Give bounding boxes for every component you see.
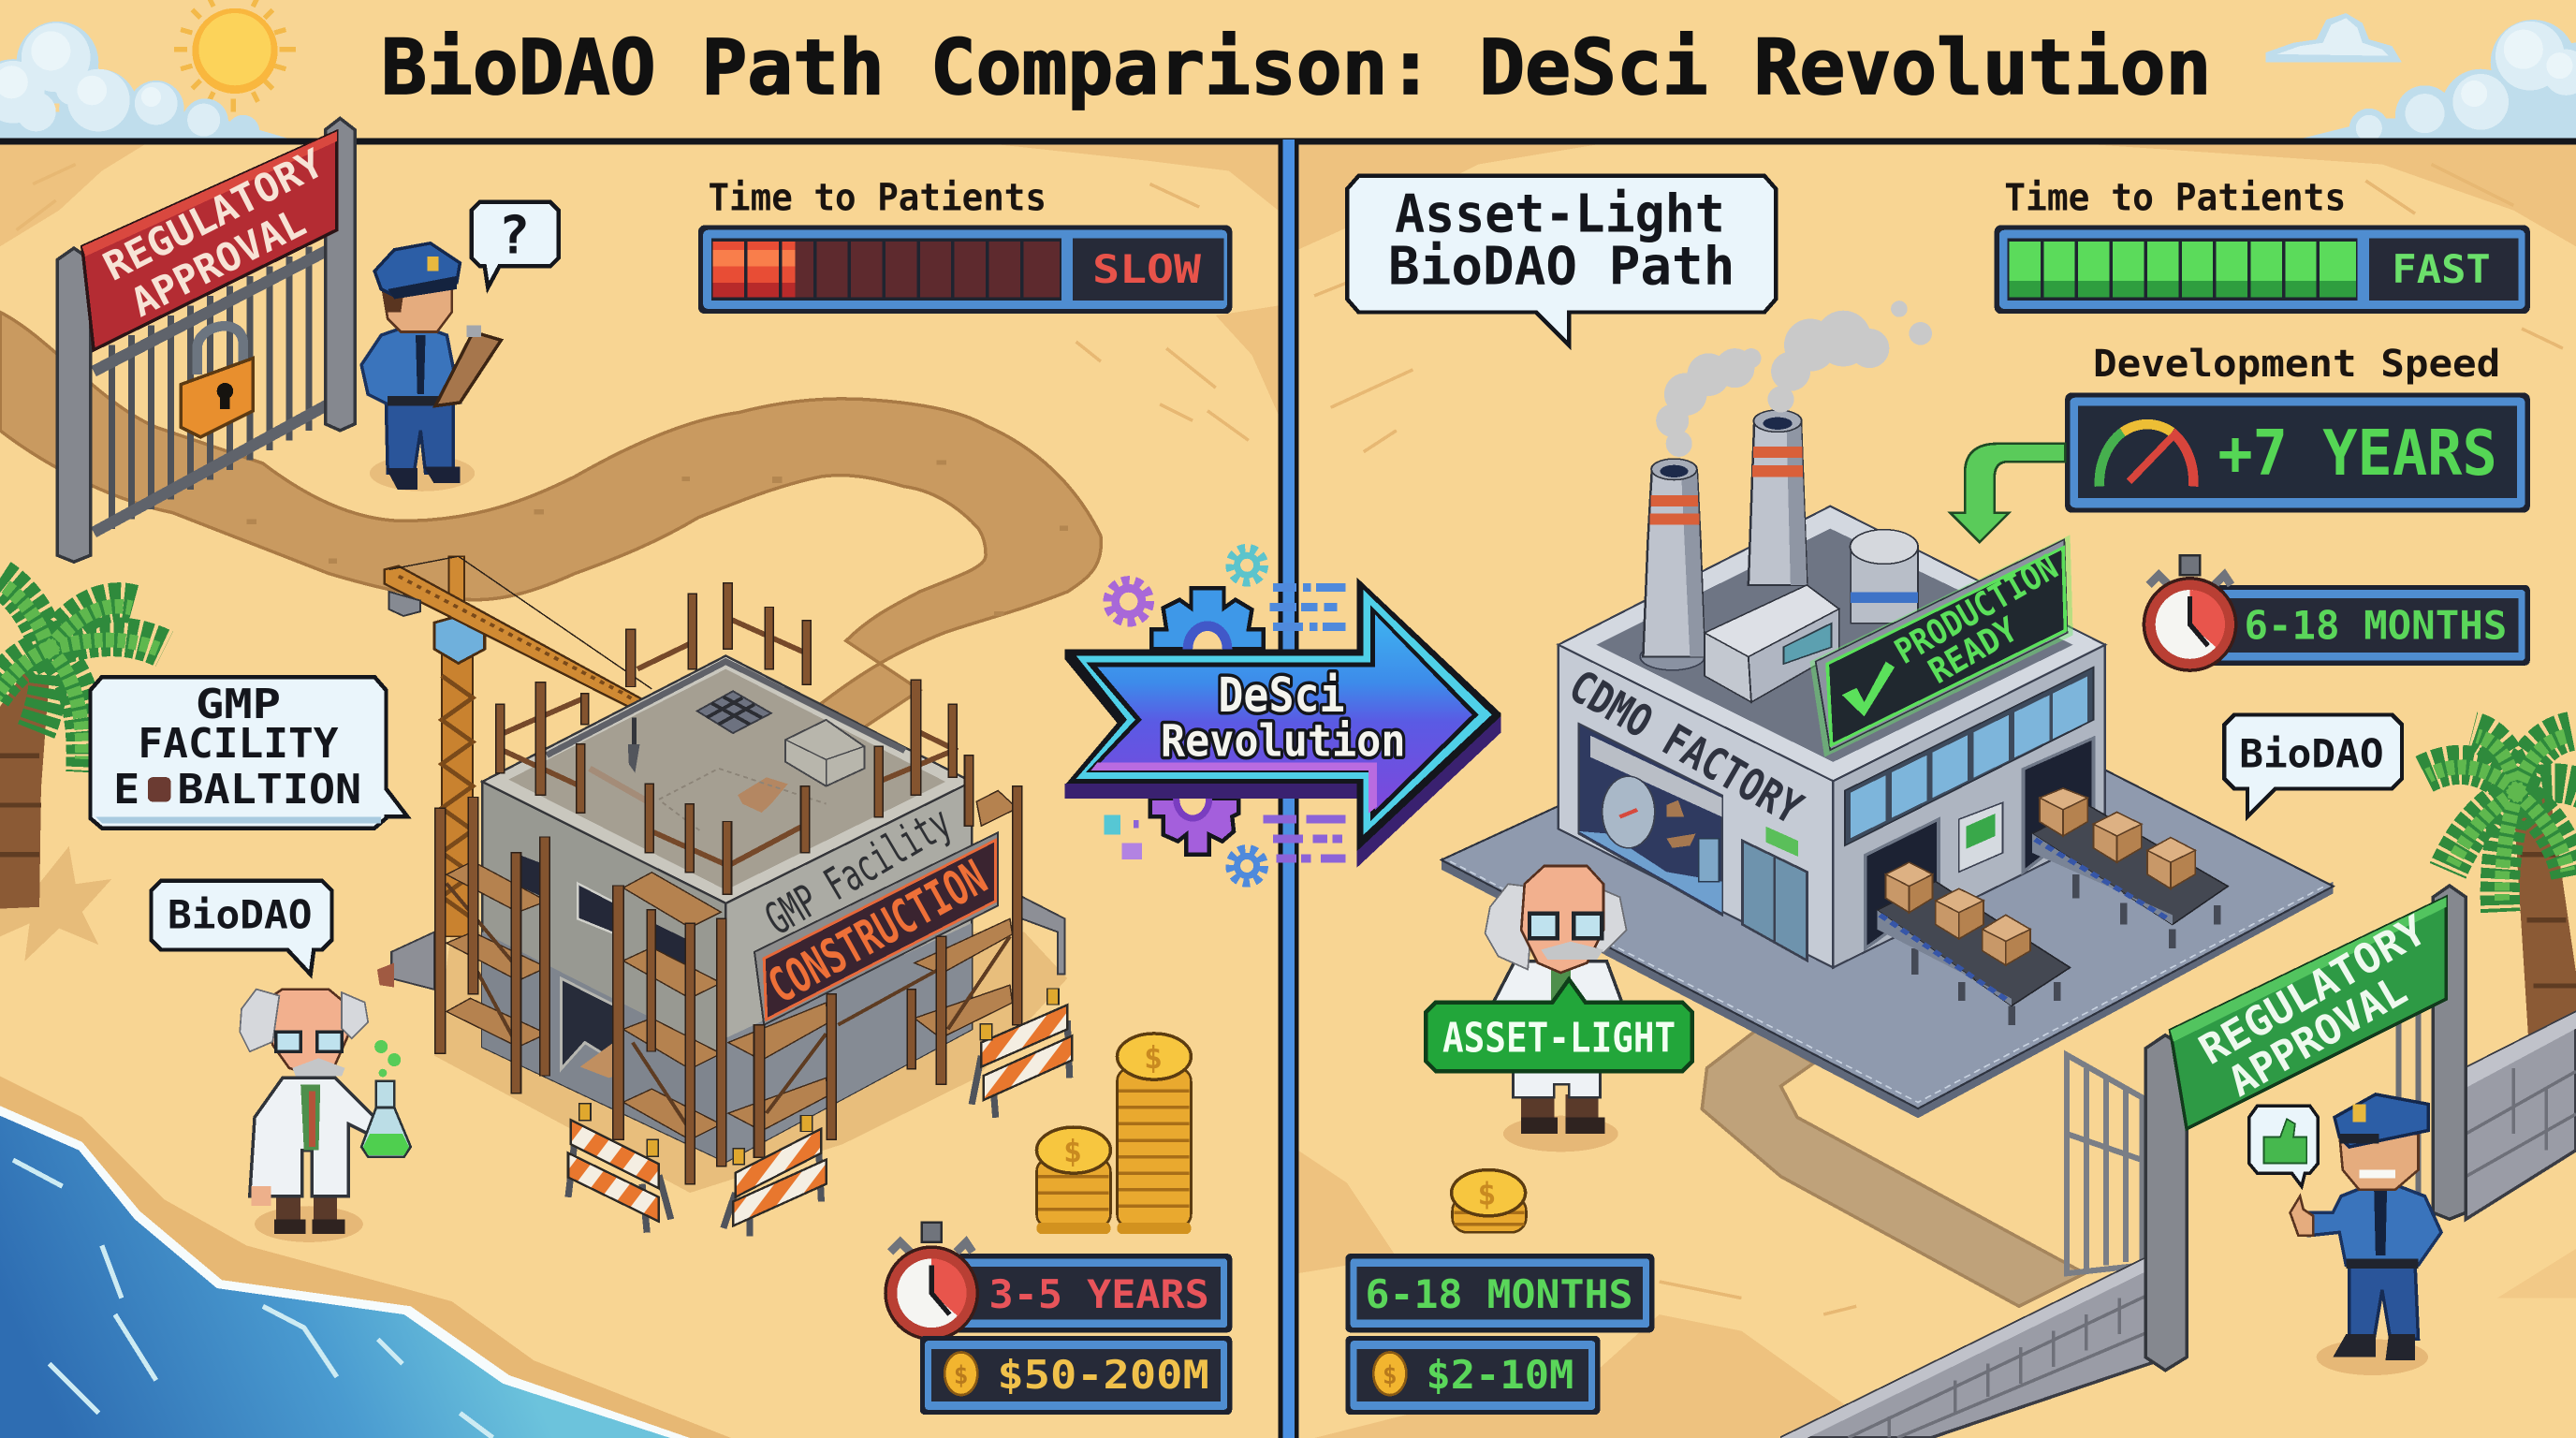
icon: striped barrier left — [568, 1104, 671, 1233]
roof tank — [1851, 530, 1918, 624]
smoke plumes — [1656, 301, 1932, 457]
window band — [1845, 668, 2093, 845]
stat panel: 50-200M cost — [920, 1336, 1232, 1415]
arrow: speed to production ready — [1950, 444, 2065, 542]
badge: asset-light — [1426, 979, 1692, 1071]
callout: GMP facility escalation: FACILITY — [138, 720, 339, 768]
chimney left — [1640, 459, 1705, 670]
crane mast — [385, 556, 664, 936]
icon: left palm tree — [0, 579, 165, 961]
callout: GMP facility escalation: GMP — [196, 681, 281, 728]
icon: right palm tree — [2422, 731, 2576, 1117]
icon: right small cloud — [2265, 13, 2402, 63]
character: worried police officer — [361, 202, 559, 492]
arrow label: DeSci — [1218, 668, 1345, 724]
central divider — [1278, 139, 1298, 1438]
icon: locked regulatory gate: REGULATORY — [96, 139, 331, 290]
icon: open regulatory gate and walls: REGULATORY — [2191, 906, 2435, 1075]
arrow label — [1161, 668, 1405, 767]
stat panel: 6-18 months bottom — [1345, 1254, 1654, 1332]
red banner — [82, 131, 337, 350]
scaffold braces — [446, 884, 1010, 1126]
concrete plate — [1442, 858, 2334, 1118]
icon: small blue gear — [1231, 849, 1264, 882]
garage opening — [1579, 724, 1722, 915]
icon: small coin stack — [1452, 1170, 1526, 1232]
speech bubble: asset-light BioDAO path — [1347, 176, 1776, 345]
stat panel: 6-18 months top: 6-18 MONTHS — [2244, 603, 2507, 649]
text: construction sign: CONSTRUCTION — [759, 850, 996, 1015]
dirt path to open gate — [1702, 1030, 2085, 1306]
text: production ready: READY — [1922, 609, 2025, 692]
question bubble: ? — [498, 205, 530, 266]
character: BioDAO scientist with flask — [240, 990, 411, 1242]
stat panel: 3-5 years — [886, 1223, 1232, 1339]
panel: asset-light path ground — [1298, 139, 2576, 1438]
callout: GMP facility escalation: BALTION — [178, 766, 361, 814]
gate posts — [2145, 1035, 2187, 1371]
callout: GMP facility escalation — [91, 677, 407, 829]
callout: GMP facility escalation: E — [113, 766, 139, 814]
open gate leaf — [2067, 1055, 2143, 1273]
illustration: GMP facility under construction — [377, 556, 1072, 1236]
speech bubble: asset-light BioDAO path: BioDAO Path — [1388, 237, 1734, 298]
icon: large purple gear — [1150, 799, 1238, 855]
meter: fast progress bar: FAST — [2392, 246, 2491, 292]
thumbs up bubble — [2249, 1106, 2318, 1186]
icon: small cyan gear — [1231, 549, 1264, 581]
icon: large blue gear — [1151, 588, 1264, 649]
icon: stacked coins left — [1036, 1034, 1191, 1234]
building faces — [1559, 645, 1833, 967]
stat panel: 50-200M cost: $50-200M — [997, 1352, 1209, 1398]
stat panel: 2-10M cost: $ — [1383, 1362, 1398, 1390]
stat panel: 6-18 months bottom: 6-18 MONTHS — [1365, 1271, 1633, 1317]
roof utility block — [1705, 585, 1839, 702]
frame top line — [0, 138, 2576, 144]
loading docks — [1866, 819, 1939, 948]
icon: small purple gear — [1109, 581, 1149, 621]
meter: fast progress bar — [1995, 225, 2530, 314]
stat panel: 6-18 months top — [2144, 555, 2530, 670]
data dashes — [1270, 583, 1345, 631]
meter: slow progress bar: SLOW — [1092, 246, 1202, 292]
chimney right — [1749, 410, 1807, 585]
ocean shoreline — [0, 1077, 731, 1438]
icon: sun — [174, 0, 296, 111]
speech bubble: asset-light BioDAO path: Asset-Light — [1395, 183, 1725, 244]
conveyor back — [2032, 805, 2228, 948]
glass door — [1743, 841, 1807, 961]
conveyor front — [1877, 882, 2070, 1025]
dirt path to regulatory gate — [0, 312, 1101, 740]
gate bars — [111, 246, 309, 529]
sign: production ready board — [1809, 535, 2073, 757]
cardboard boxes — [1886, 788, 2195, 965]
icon: stopwatch red — [886, 1223, 977, 1339]
meter label: time to patients fast: Time to Patients — [2004, 176, 2346, 220]
icon: open regulatory gate and walls — [1781, 886, 2576, 1438]
badge: asset-light: ASSET-LIGHT — [1442, 1014, 1676, 1062]
sky with sun and clouds — [0, 0, 2576, 139]
icon: striped barrier center — [724, 1115, 827, 1236]
icon: speed gauge — [2100, 424, 2193, 487]
small pictograms — [1104, 815, 1142, 859]
stat panel: 50-200M cost: $ — [954, 1362, 969, 1390]
icon: open regulatory gate and walls: APPROVAL — [2220, 966, 2415, 1107]
speech bubble: BioDAO right — [2224, 714, 2402, 816]
icon: small coin stack: $ — [1477, 1175, 1496, 1211]
stat panel: plus 7 years — [2065, 392, 2530, 513]
stat panel: 2-10M cost — [1345, 1336, 1600, 1415]
darker sand patches — [0, 144, 1278, 414]
arrow label: Revolution — [1161, 715, 1405, 767]
icon: locked regulatory gate: APPROVAL — [124, 199, 313, 326]
concrete walls — [482, 782, 725, 1162]
arrow: DeSci revolution — [1064, 578, 1500, 868]
icon: stacked coins left: $ — [1144, 1039, 1163, 1076]
icon: left clouds — [0, 22, 292, 148]
front wall — [1781, 1252, 2159, 1438]
illustration: CDMO factory — [1442, 301, 2334, 1118]
stat panel: plus 7 years: +7 YEARS — [2217, 417, 2497, 490]
speech bubble: BioDAO right: BioDAO — [2239, 731, 2384, 777]
icon: green flask — [361, 1040, 411, 1157]
gate bars behind banner — [2398, 977, 2419, 1208]
scaffold posts — [435, 786, 1022, 1184]
scaffold planks — [446, 790, 1017, 1139]
text: production ready: PRODUCTION — [1888, 547, 2065, 672]
speech bubble: BioDAO left: BioDAO — [168, 892, 312, 938]
icon: stacked coins left: $ — [1063, 1133, 1082, 1169]
title: BioDAO Path Comparison: DeSci Revolution — [381, 24, 2211, 112]
padlock — [198, 326, 243, 374]
text: CDMO factory wall label: CDMO FACTORY — [1560, 661, 1811, 835]
character: approving police officer — [2249, 1094, 2441, 1375]
gate posts — [57, 248, 91, 562]
green banner — [2170, 897, 2446, 1129]
stat panel: 2-10M cost: $2-10M — [1426, 1352, 1573, 1398]
meter label: time to patients slow: Time to Patients — [708, 176, 1046, 220]
icon: locked regulatory gate — [57, 118, 355, 562]
question bubble — [472, 202, 559, 287]
roof rails — [499, 618, 958, 866]
sign: GMP construction board — [754, 832, 998, 1025]
icon: stopwatch green panel — [2144, 555, 2236, 670]
icon: right big cloud — [2305, 20, 2576, 139]
meter: slow progress bar — [698, 225, 1232, 314]
stat panel: 3-5 years: 3-5 YEARS — [989, 1271, 1209, 1317]
panel: traditional path beach — [0, 139, 1278, 1438]
right wall — [2466, 1012, 2576, 1219]
label: development speed: Development Speed — [2093, 342, 2500, 386]
roof — [482, 655, 972, 903]
icon: striped barrier right — [972, 989, 1072, 1118]
character: asset-light scientist — [1426, 866, 1692, 1152]
DeSci revolution emblem — [1064, 549, 1500, 882]
speech bubble: BioDAO left — [151, 881, 332, 975]
text: GMP Facility wall label: GMP Facility — [757, 797, 960, 946]
